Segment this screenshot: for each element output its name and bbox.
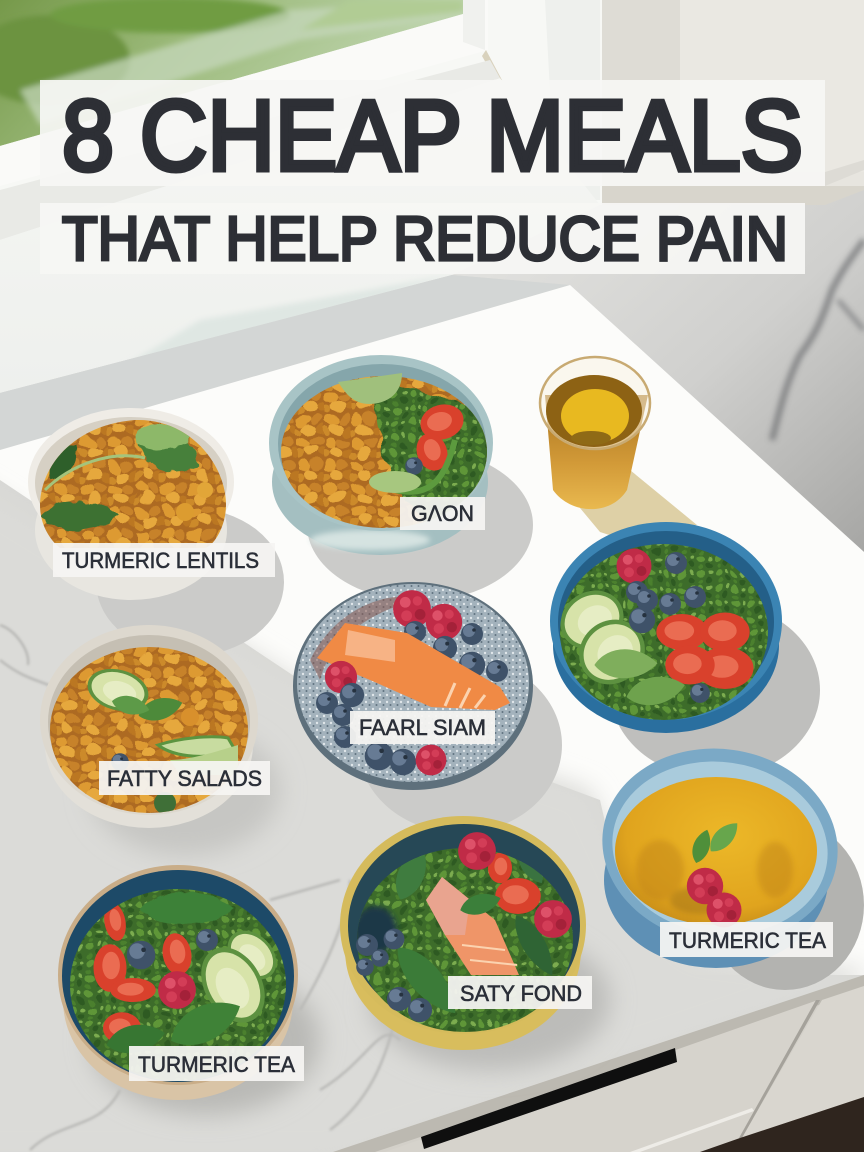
floor [700, 1097, 864, 1152]
marble veins on counter [0, 625, 400, 1150]
label: fatty salads [99, 761, 270, 795]
lower drawer divider [630, 1108, 754, 1152]
sill lower tint [110, 275, 452, 375]
label: gaon [400, 497, 485, 530]
avocado slice [338, 373, 402, 404]
bowl: lentil and greens salad [269, 355, 493, 555]
garden view [0, 0, 463, 146]
label: faarl siam: FAARL SIAM [359, 715, 486, 740]
salmon fillet [317, 623, 510, 710]
wall right of window [600, 0, 864, 190]
countertop [0, 275, 864, 1152]
window frame [0, 0, 602, 250]
label: turmeric tea left [129, 1046, 304, 1081]
title banner line 2: THAT HELP REDUCE PAIN [62, 205, 788, 274]
label: saty fond: SATY FOND [460, 981, 582, 1006]
bowl: lentils with cucumber [40, 625, 260, 828]
plate: salmon and berries [293, 582, 533, 790]
glass of turmeric tea [540, 357, 697, 540]
drawer handle [421, 1048, 677, 1149]
counter edge [333, 975, 864, 1152]
bowl: turmeric soup [590, 734, 850, 968]
window inner frame [0, 0, 488, 186]
bowl: greens, berries and cucumber [550, 522, 782, 733]
label: turmeric tea left: TURMERIC TEA [138, 1052, 295, 1077]
bowl: strawberry salad [58, 865, 298, 1100]
wall panel shading [590, 0, 864, 205]
label: saty fond [448, 976, 592, 1009]
right door [742, 986, 864, 1138]
label: fatty salads: FATTY SALADS [107, 766, 262, 791]
label: turmeric lentils: TURMERIC LENTILS [62, 548, 259, 573]
label: turmeric tea right [660, 922, 833, 957]
marble shelf back [452, 190, 864, 560]
window mullion [545, 0, 600, 200]
sill shade below frame [0, 60, 500, 240]
drawer front [385, 1000, 818, 1152]
window sill [0, 78, 600, 393]
spinach leaves [39, 417, 207, 530]
label: faarl siam [350, 711, 495, 744]
title banner line 1: 8 CHEAP MEALS [62, 80, 803, 192]
lower counter shade [0, 480, 864, 1152]
garden foliage [0, 0, 463, 125]
bowl: turmeric lentils [28, 408, 234, 600]
cast shadows of bowls [90, 449, 864, 1115]
cabinet [333, 975, 864, 1152]
beige sill line [482, 50, 503, 84]
label: gaon: GΛON [411, 501, 474, 526]
shaded strip near window [0, 275, 570, 450]
soup texture [636, 840, 793, 914]
label: turmeric tea right: TURMERIC TEA [669, 928, 826, 953]
sunlit area [0, 285, 864, 975]
glass shadow [565, 470, 697, 540]
bowl: salmon and greens [340, 816, 586, 1050]
drawer gap [739, 1000, 820, 1138]
marble veins [450, 240, 864, 440]
